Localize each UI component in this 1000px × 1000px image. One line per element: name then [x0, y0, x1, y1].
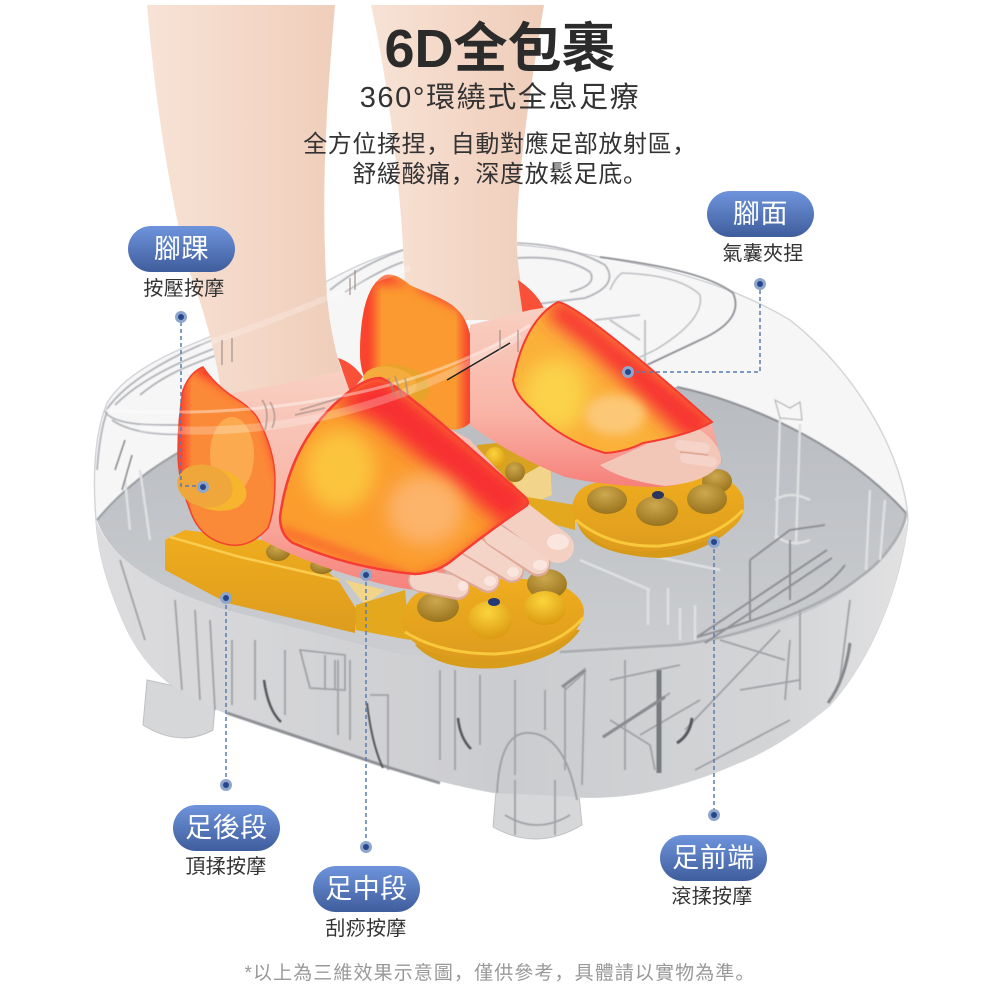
caption: 腳踝: 按壓按摩 — [143, 278, 225, 300]
label: 足後段: 足後段 — [185, 813, 268, 843]
legs — [147, 5, 544, 400]
device front wall — [96, 520, 908, 797]
caption: 足前端: 滾揉按摩 — [671, 886, 753, 908]
wall dark accents — [264, 643, 850, 773]
back ankle knob — [361, 360, 433, 410]
subtitle: 360°環繞式全息足療 — [360, 82, 640, 114]
label: 足中段: 足中段 — [325, 874, 408, 904]
footnote: *以上為三維效果示意圖，僅供參考，具體請以實物為準。 — [244, 963, 756, 984]
device inner floor — [97, 387, 906, 655]
description text: 舒緩酸痛，深度放鬆足底。 — [352, 161, 648, 188]
transparent lid band over legs — [105, 268, 530, 431]
caption: 足中段: 刮痧按摩 — [325, 918, 407, 940]
callout leader lines — [181, 290, 760, 845]
back foot with air bag — [470, 295, 725, 487]
product illustration — [94, 5, 909, 853]
description text — [303, 131, 697, 188]
caption: 足後段: 頂揉按摩 — [185, 856, 267, 878]
floor rim and interior structure — [97, 387, 906, 652]
title: 6D全包裹 — [384, 19, 616, 79]
label: 足前端 — [660, 835, 767, 881]
toes — [420, 510, 558, 588]
lid rings — [97, 243, 610, 470]
label: 足前端: 足前端 — [672, 843, 755, 873]
front foot with air bags — [170, 358, 569, 592]
label: 腳踝: 腳踝 — [154, 234, 209, 264]
callout marker dots — [175, 278, 766, 853]
device dome shell — [94, 243, 908, 797]
label: 腳面 — [707, 191, 814, 237]
description text: 全方位揉捏，自動對應足部放射區， — [303, 131, 697, 158]
front foot tray — [165, 530, 584, 669]
caption: 腳面: 氣囊夾捏 — [722, 243, 804, 265]
device feet — [143, 680, 582, 839]
lid right lobe — [115, 257, 802, 490]
front wall detail lines — [120, 560, 850, 835]
back ankle air bag — [360, 274, 544, 430]
label: 足中段 — [313, 866, 420, 912]
label: 腳踝 — [128, 226, 235, 272]
label: 腳面: 腳面 — [733, 199, 788, 229]
back foot tray — [477, 440, 744, 558]
far side of ankle bag — [338, 358, 363, 392]
label: 足後段 — [173, 805, 280, 851]
